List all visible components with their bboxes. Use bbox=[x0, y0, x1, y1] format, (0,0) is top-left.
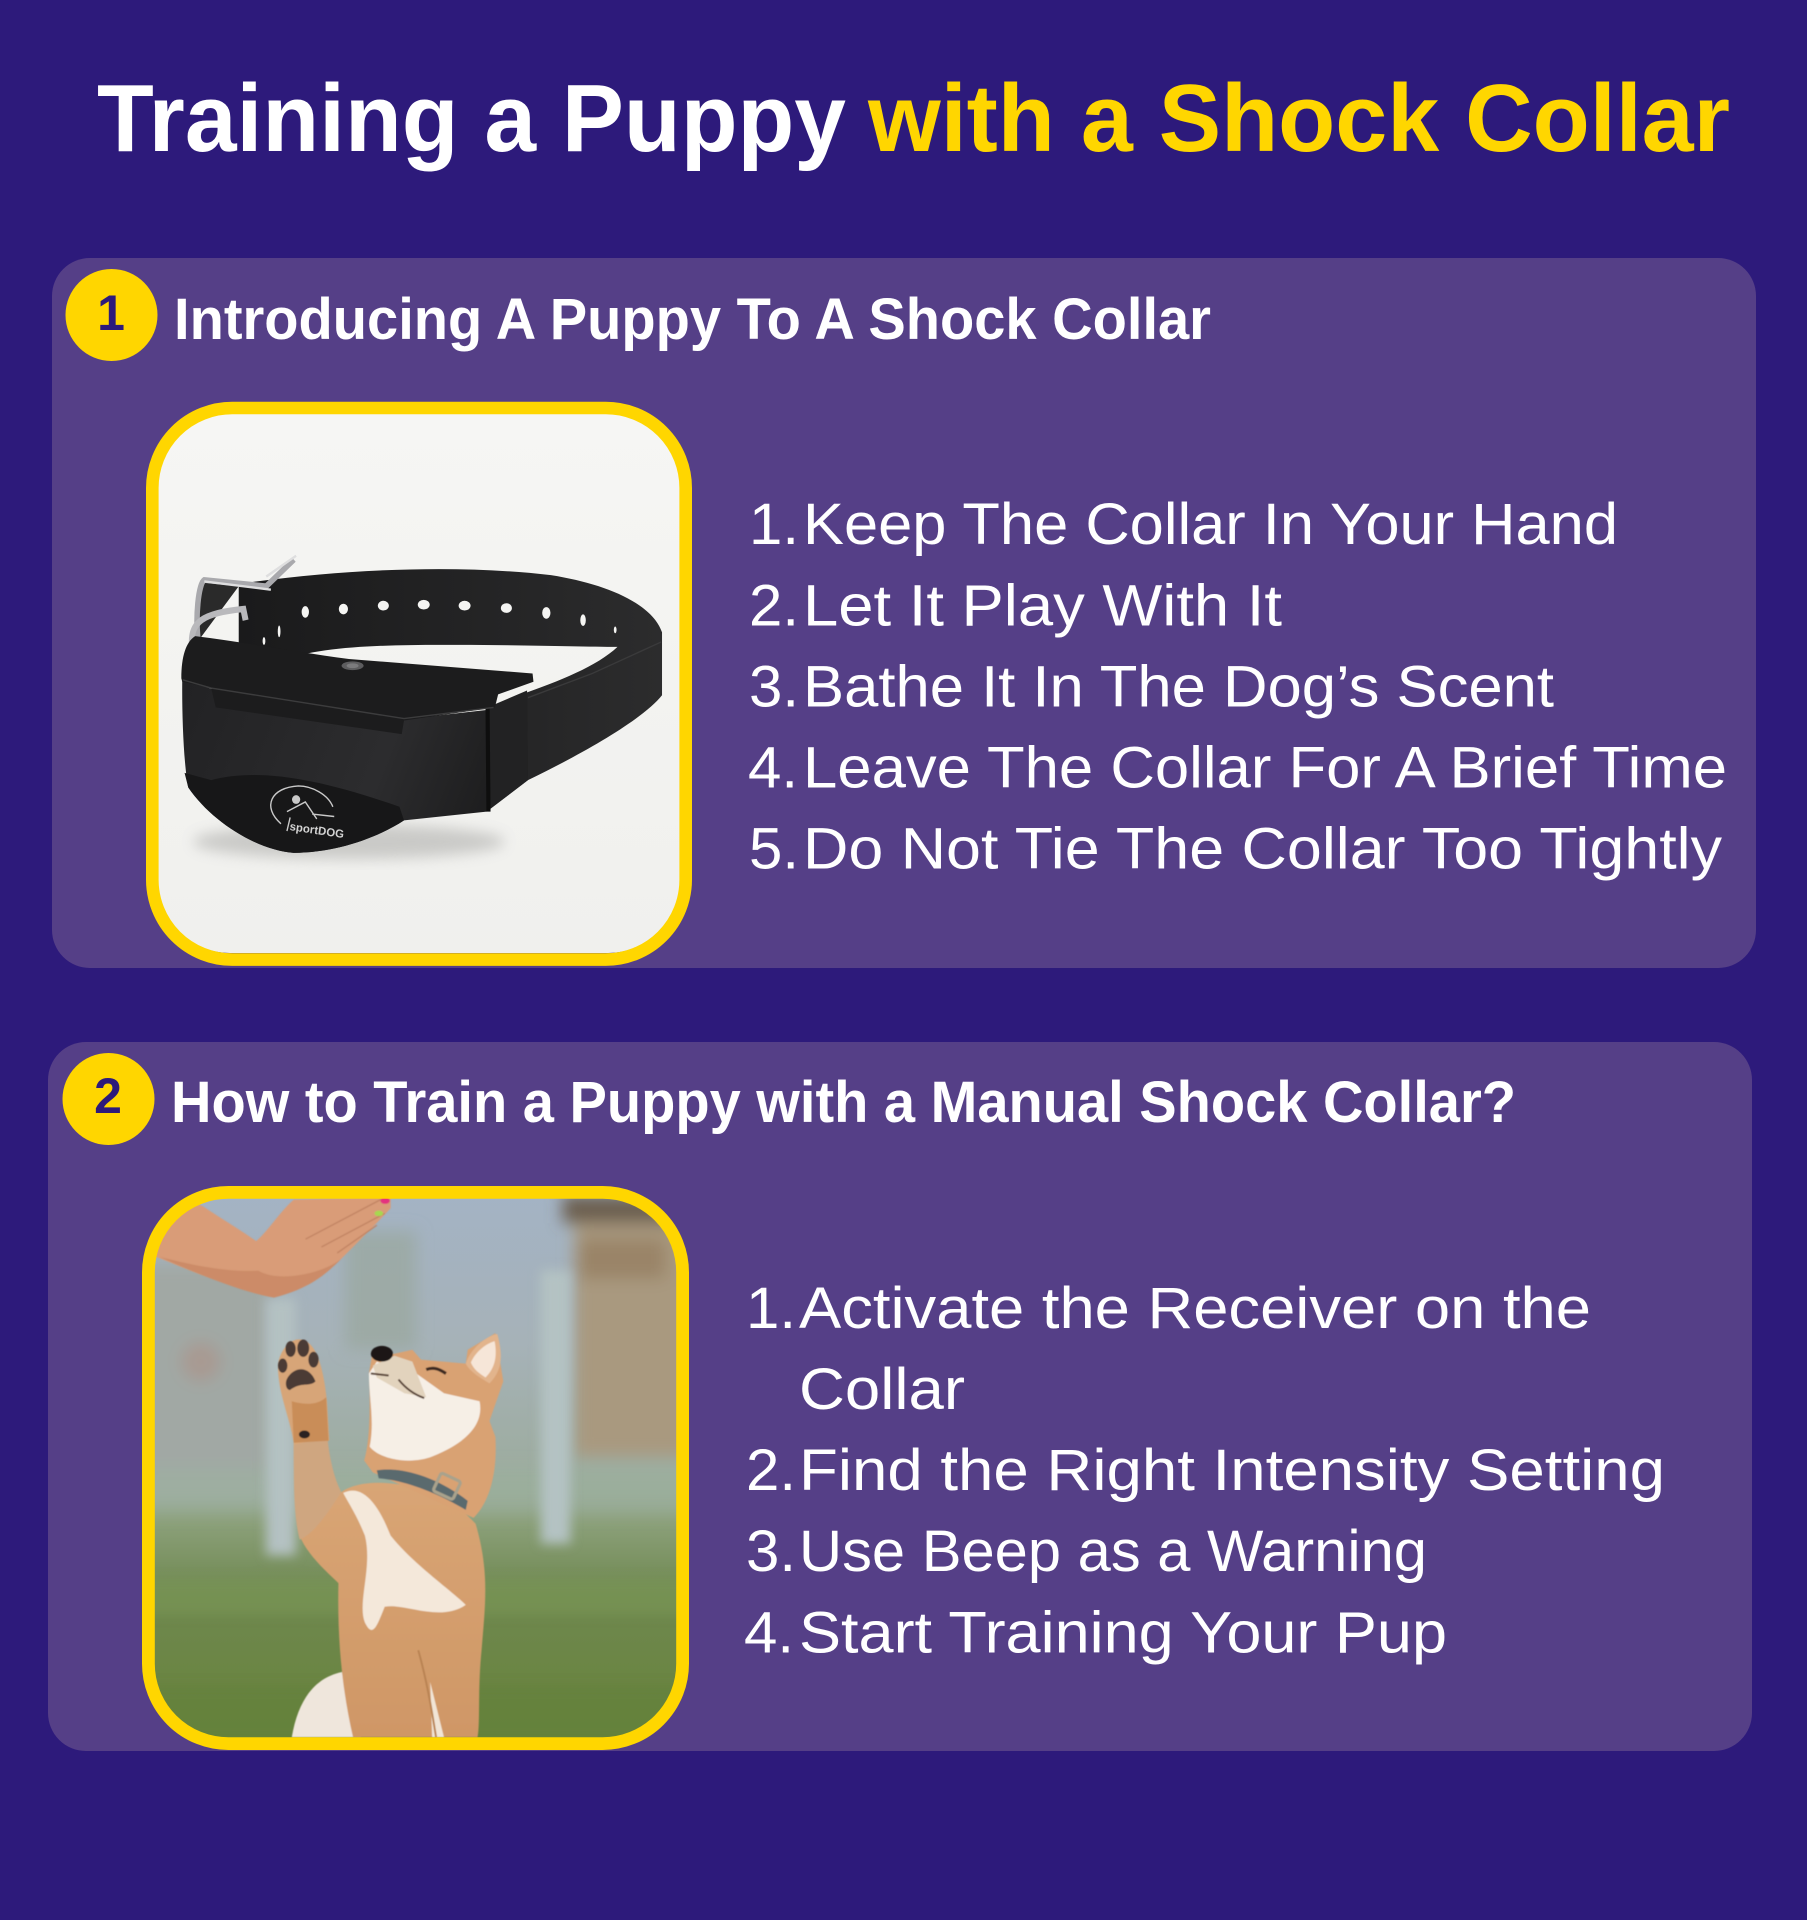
photo: black shock collar bbox=[146, 402, 692, 966]
panel 2 numbered list: 4. bbox=[744, 1600, 794, 1666]
title: with a Shock Collar bbox=[867, 65, 1730, 172]
panel: introducing a puppy to a shock collar bbox=[52, 258, 1756, 968]
title: Training a Puppy bbox=[97, 65, 846, 172]
number badge 2: 2 bbox=[94, 1068, 122, 1124]
dog collar bbox=[377, 1470, 468, 1510]
panel 2 numbered list: Collar bbox=[799, 1357, 965, 1422]
head and neck bbox=[364, 1333, 503, 1518]
panel 2 numbered list: 1. bbox=[746, 1276, 796, 1341]
hand bbox=[156, 1198, 392, 1298]
sitting leg bbox=[292, 1672, 361, 1737]
panel 1 numbered list: 1. bbox=[749, 492, 799, 557]
number badge 1: 1 bbox=[97, 285, 125, 341]
puppy bbox=[278, 1333, 503, 1737]
yellow photo frame bbox=[152, 408, 686, 960]
panel: how to train a puppy with a manual shock collar bbox=[48, 1042, 1752, 1753]
body bbox=[294, 1433, 485, 1737]
photo: black shock collar: sportDOG bbox=[289, 821, 345, 841]
panel 1 numbered list: 5. bbox=[749, 816, 799, 882]
panel 1 numbered list: Do Not Tie The Collar Too Tightly bbox=[803, 816, 1722, 882]
panel 1 background bbox=[52, 258, 1756, 968]
paw bbox=[278, 1339, 329, 1443]
panel 1 numbered list: 3. bbox=[749, 654, 799, 720]
panel 1 numbered list: Keep The Collar In Your Hand bbox=[803, 492, 1618, 557]
right bracket bbox=[487, 690, 528, 812]
muzzle and throat white bbox=[369, 1362, 480, 1461]
panel 1 numbered list: 4. bbox=[748, 736, 798, 800]
panel 2 numbered list: 3. bbox=[746, 1519, 796, 1584]
panel 2 heading: How to Train a Puppy with a Manual Shock Collar? bbox=[171, 1070, 1516, 1135]
blurred backdrop bbox=[154, 1198, 676, 1738]
panel 2 numbered list bbox=[744, 1276, 1665, 1666]
panel 1 numbered list: 2. bbox=[749, 574, 799, 638]
panel 2 numbered list: Use Beep as a Warning bbox=[799, 1519, 1427, 1584]
panel 1 numbered list: Let It Play With It bbox=[803, 574, 1282, 638]
chest white bbox=[343, 1491, 466, 1630]
panel 2 numbered list: Activate the Receiver on the bbox=[799, 1276, 1591, 1341]
number badge 1 bbox=[66, 269, 158, 361]
photo: puppy giving a high five bbox=[140, 1176, 693, 1753]
lid bbox=[181, 636, 533, 734]
ear bbox=[466, 1334, 501, 1383]
number badge 2 bbox=[62, 1053, 154, 1145]
receiver body bbox=[182, 678, 528, 853]
panel 1 numbered list bbox=[748, 492, 1727, 882]
panel 1 heading: Introducing A Puppy To A Shock Collar bbox=[174, 287, 1211, 352]
panel 1 numbered list: Leave The Collar For A Brief Time bbox=[803, 736, 1727, 800]
strap bbox=[239, 569, 662, 780]
yellow photo frame bbox=[148, 1192, 683, 1744]
badge plate bbox=[185, 773, 404, 853]
strap holes bbox=[263, 600, 617, 645]
brand mark bbox=[271, 786, 334, 831]
title bbox=[97, 65, 1730, 172]
panel 1 numbered list: Bathe It In The Dog’s Scent bbox=[803, 654, 1554, 720]
buckle bbox=[200, 583, 238, 637]
panel 2 numbered list: Start Training Your Pup bbox=[799, 1600, 1447, 1666]
arm shading bbox=[294, 1437, 341, 1540]
panel 2 numbered list: 2. bbox=[746, 1438, 796, 1503]
panel 2 numbered list: Find the Right Intensity Setting bbox=[799, 1438, 1665, 1503]
nose, eye and mouth bbox=[371, 1346, 393, 1362]
panel 2 background bbox=[48, 1042, 1752, 1751]
